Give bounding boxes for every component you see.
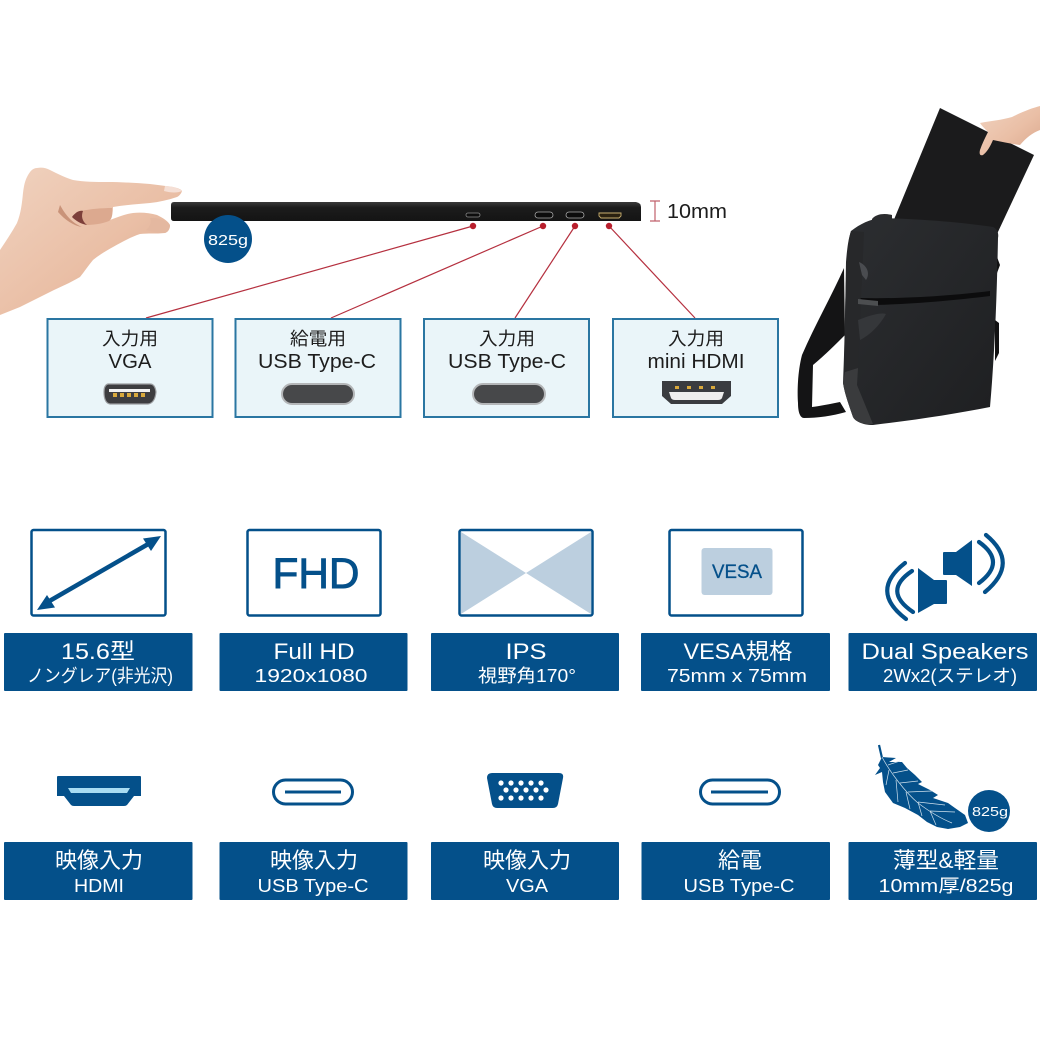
- feature: USB-C power: 給電: [718, 848, 762, 873]
- feature: USB-C video input: [220, 780, 408, 900]
- feature: VESA: 75mm x 75mm: [667, 666, 807, 686]
- icon: FHD frame: FHD: [272, 550, 360, 598]
- icon: diagonal arrow frame: [32, 530, 166, 616]
- feature: thin and light: 10mm厚/825g: [878, 876, 1014, 896]
- port: input USB-C on monitor: [566, 212, 584, 218]
- port: VGA on monitor: [466, 213, 480, 217]
- panel: input VGA port: [48, 319, 212, 417]
- icon: USB-C outline: [700, 780, 780, 804]
- leader lines: [146, 223, 695, 318]
- panel: power USB-C port: USB Type-C: [258, 351, 376, 373]
- feature: VESA: [641, 530, 830, 691]
- feature: HDMI input: HDMI: [74, 876, 124, 896]
- panel: input mini HDMI port: [613, 319, 778, 417]
- feature: USB-C video input: USB Type-C: [258, 876, 369, 896]
- panel: input VGA port: VGA: [108, 351, 152, 373]
- icon: HDMI connector: [57, 776, 141, 806]
- feature: VGA input: VGA: [506, 876, 548, 896]
- icon: port connector: [104, 384, 156, 404]
- panel: input mini HDMI port: mini HDMI: [648, 351, 744, 373]
- backpack body: [843, 218, 998, 425]
- icon: VESA frame: VESA: [712, 562, 762, 583]
- feature: IPS: IPS: [506, 639, 546, 664]
- panel: input USB-C port: 入力用: [479, 329, 535, 349]
- feature: HDMI input: 映像入力: [55, 848, 143, 873]
- feature: IPS: 視野角170°: [478, 666, 576, 686]
- icon: viewing angle frame: [460, 530, 592, 616]
- port: mini HDMI on monitor: [599, 213, 621, 218]
- panel: input VGA port: 入力用: [102, 329, 158, 349]
- feature: VGA input: 映像入力: [483, 848, 571, 873]
- feature: screen size: 15.6型: [61, 639, 135, 664]
- curled middle finger: [81, 208, 112, 225]
- feature: thin and light: 薄型&軽量: [893, 848, 999, 873]
- monitor side view: [171, 202, 641, 221]
- icon: port connector: [662, 381, 731, 404]
- feature: dual speakers: Dual Speakers: [862, 639, 1028, 664]
- feature: Full HD: 1920x1080: [254, 666, 368, 686]
- icon: VESA frame: [670, 530, 802, 616]
- feature: Full HD: [220, 530, 408, 691]
- icon: USB-C outline: [274, 780, 352, 804]
- icon: hand holding monitor: [0, 168, 182, 315]
- backpack strap: [798, 268, 846, 418]
- feature: HDMI input: [4, 776, 192, 900]
- feature: Full HD: Full HD: [274, 639, 354, 664]
- feature: IPS: [431, 530, 619, 691]
- feature: dual speakers: [848, 535, 1037, 691]
- weight badge: [204, 215, 252, 263]
- hand: [980, 106, 1040, 155]
- feature: thin and light: [848, 745, 1037, 900]
- feature: VESA: VESA規格: [684, 639, 792, 664]
- icon: FHD frame: [248, 530, 380, 616]
- panel: input USB-C port: USB Type-C: [448, 351, 566, 373]
- icon: feather with weight: 825g: [972, 804, 1008, 819]
- panel: power USB-C port: [236, 319, 400, 417]
- icon: port connector: [282, 384, 354, 404]
- icon: two speakers: [887, 535, 1003, 619]
- feature: dual speakers: 2Wx2(ステレオ): [883, 666, 1017, 686]
- monitor folded: [893, 108, 1034, 234]
- photo: monitor going into backpack: [798, 106, 1040, 425]
- feature: screen size: [4, 530, 192, 691]
- feature: USB-C video input: 映像入力: [270, 848, 358, 873]
- panel: power USB-C port: 給電用: [290, 329, 346, 349]
- feature: USB-C power: USB Type-C: [684, 876, 795, 896]
- thickness marker 10mm: 10mm: [667, 201, 727, 223]
- icon: port connector: [473, 384, 545, 404]
- panel: input mini HDMI port: 入力用: [668, 329, 724, 349]
- panel: input USB-C port: [424, 319, 589, 417]
- feature: USB-C power: [642, 780, 830, 900]
- feature: VGA input: [431, 773, 619, 900]
- weight badge: 825g: [208, 232, 248, 249]
- port: power USB-C on monitor: [535, 212, 553, 218]
- icon: VGA connector: [487, 773, 563, 808]
- backpack top handle: [872, 214, 892, 222]
- icon: feather with weight: [875, 745, 1010, 832]
- feature: screen size: ノングレア(非光沢): [27, 666, 173, 686]
